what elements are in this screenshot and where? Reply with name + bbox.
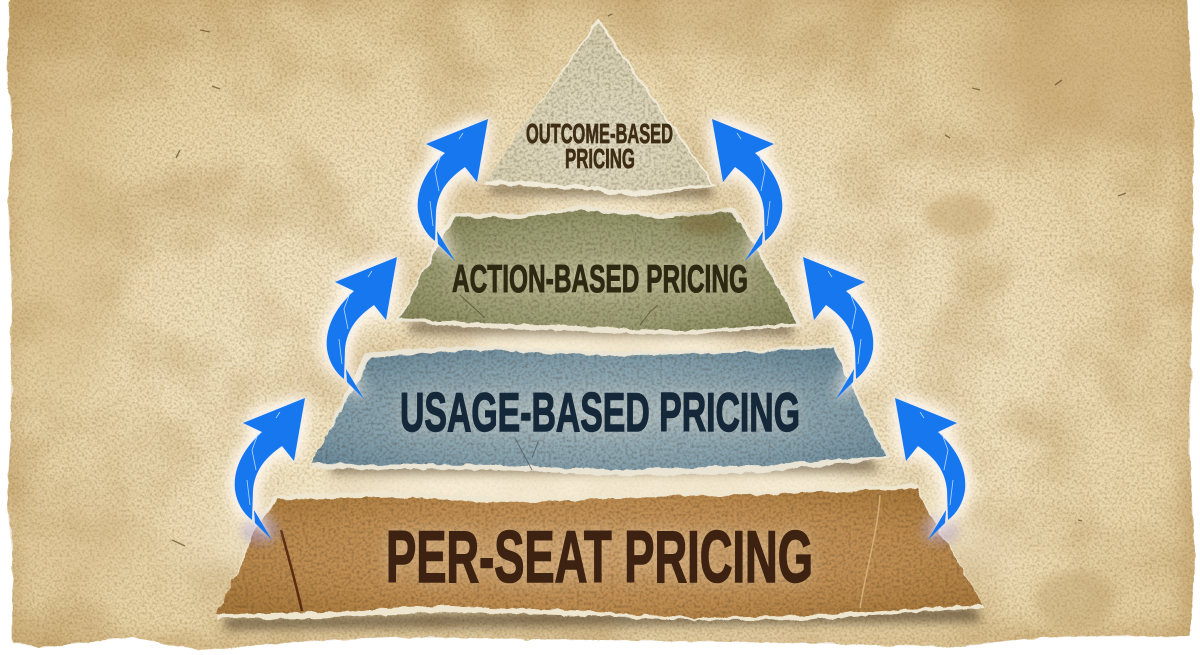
arrow: upper right — [712, 119, 782, 261]
label: outcome-based pricing: PRICING — [565, 143, 635, 174]
label: action-based pricing: ACTION-BASED PRICING — [452, 258, 748, 301]
arrow: middle left — [327, 257, 397, 399]
arrow: upper left — [418, 119, 488, 261]
panel: usage-based pricing tier — [310, 344, 890, 476]
panel: per-seat pricing tier — [216, 484, 985, 630]
label: outcome-based pricing: OUTCOME-BASED — [526, 118, 673, 149]
panel: action-based pricing tier — [396, 206, 803, 336]
label: outcome-based pricing — [526, 118, 673, 174]
label: per-seat pricing: PER-SEAT PRICING — [386, 517, 813, 598]
arrow: lower left — [235, 398, 305, 540]
panel: outcome-based pricing tier — [484, 18, 716, 198]
arrow: lower right — [895, 398, 965, 540]
label: usage-based pricing: USAGE-BASED PRICING — [400, 381, 800, 443]
arrow: middle right — [803, 257, 873, 399]
